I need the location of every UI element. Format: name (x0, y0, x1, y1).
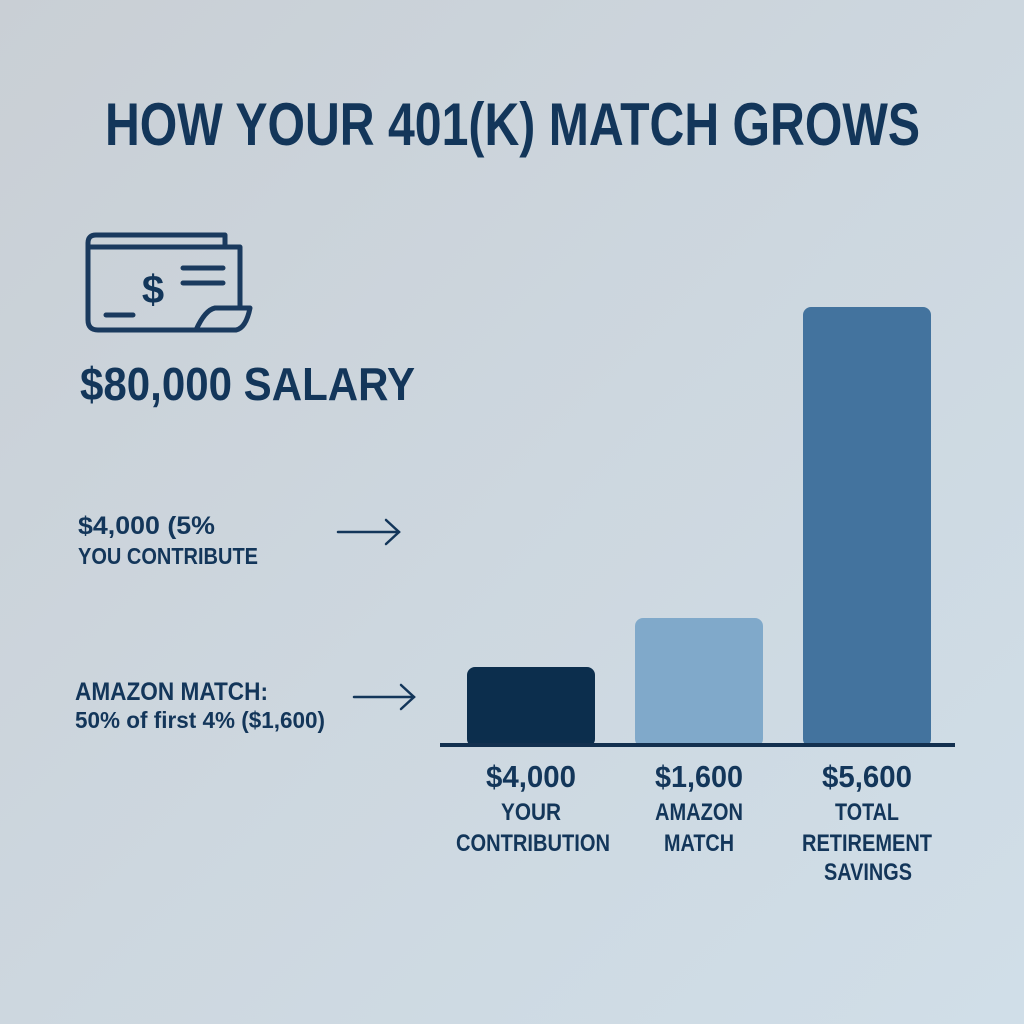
bar: your contribution (467, 667, 595, 747)
label: amazon match: $1,600 (655, 759, 743, 794)
text: amazon match: 50% of first 4% ($1,600) (75, 707, 325, 733)
label: total: $5,600 (822, 759, 912, 794)
bar: amazon match (635, 618, 763, 747)
bar: total (803, 307, 931, 747)
text: amazon match (75, 678, 325, 733)
label: your contribution (456, 759, 610, 857)
text: you contribute: YOU CONTRIBUTE (78, 543, 258, 569)
label: total: SAVINGS (824, 859, 912, 886)
bar chart (440, 307, 955, 747)
axis baseline (440, 743, 955, 747)
label: your contribution: $4,000 (486, 759, 576, 794)
label: total (802, 759, 932, 886)
label: amazon match (655, 759, 743, 857)
icon: salary check: $ (142, 268, 164, 312)
text: you contribute (78, 512, 258, 569)
label: your contribution: CONTRIBUTION (456, 830, 610, 857)
label: total: RETIREMENT (802, 830, 932, 857)
label: amazon match: MATCH (664, 830, 734, 857)
icon: salary check (88, 235, 250, 330)
text: you contribute: $4,000 (5% (78, 512, 215, 540)
arrow: match (354, 685, 414, 709)
salary heading: $80,000 SALARY (80, 358, 415, 410)
arrow: contribute (338, 520, 399, 544)
label: total: TOTAL (835, 799, 899, 826)
label: your contribution: YOUR (501, 799, 561, 826)
text: amazon match: AMAZON MATCH: (75, 678, 268, 706)
label: amazon match: AMAZON (655, 799, 743, 826)
